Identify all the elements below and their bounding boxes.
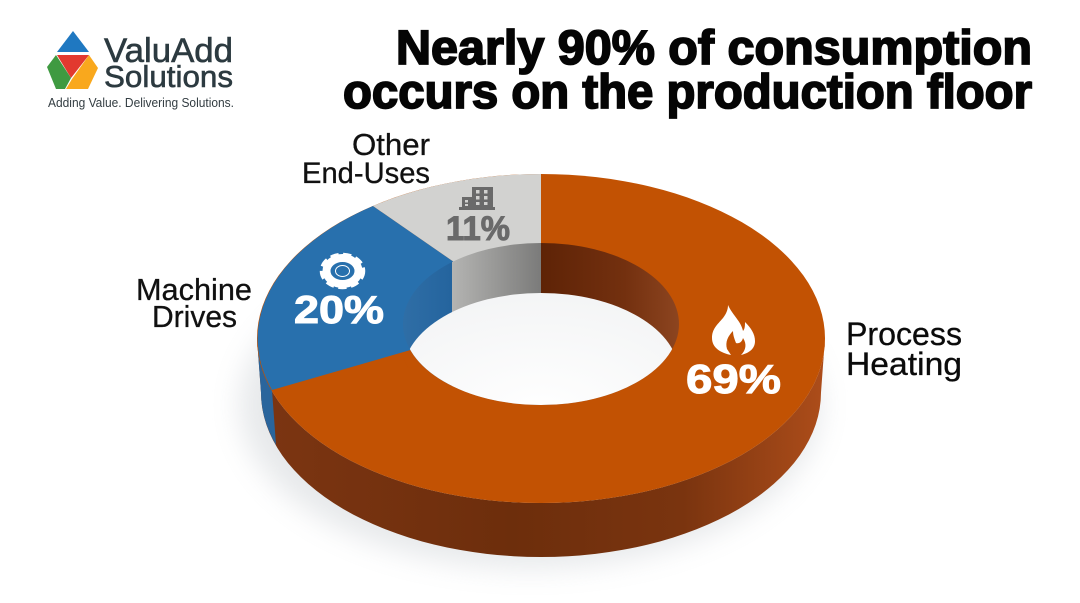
- logo wordmark: ValuAdd: [104, 32, 233, 70]
- slice: machine drives top face: [258, 206, 480, 390]
- logo icon: [47, 31, 98, 89]
- logo wordmark: Solutions: [104, 59, 233, 94]
- icon: gear: [322, 255, 363, 287]
- value: 69%: 69%: [686, 356, 781, 402]
- title: [343, 22, 1032, 119]
- title: occurs on the production floor: [343, 66, 1032, 119]
- slice: other end-uses top face: [373, 174, 541, 280]
- label: process heating: Process: [846, 316, 962, 352]
- value: 11%: 11%: [446, 210, 510, 248]
- inner wall: orange: [541, 243, 679, 405]
- slice: process heating top face: [257, 174, 825, 503]
- logo: [47, 31, 234, 110]
- inner wall: blue: [409, 262, 452, 386]
- logo tagline: Adding Value. Delivering Solutions.: [48, 96, 234, 110]
- logo wordmark: [104, 32, 233, 94]
- value: 20%: 20%: [294, 289, 384, 332]
- slice edge to cover the blue wall foot: [402, 353, 418, 368]
- label: other end-uses: Other: [352, 127, 430, 162]
- ground shadow: [240, 242, 820, 568]
- outer side wall: orange: [257, 338, 825, 557]
- inner wall: grey: [452, 243, 541, 405]
- label: process heating: [846, 316, 962, 382]
- 3D donut chart: [240, 174, 825, 568]
- label: other end-uses: End-Uses: [302, 157, 430, 190]
- inner wall and hole: [409, 243, 679, 405]
- title: Nearly 90% of consumption: [396, 22, 1032, 75]
- label: machine drives: [136, 272, 252, 334]
- label: machine drives: Machine: [136, 272, 252, 307]
- icon: flame: [712, 305, 755, 355]
- label: process heating: Heating: [846, 346, 962, 382]
- label: other end-uses: [302, 127, 430, 190]
- icon: building: [459, 187, 495, 210]
- hole: [410, 293, 672, 405]
- outer side wall: blue: [257, 338, 276, 445]
- label: machine drives: Drives: [152, 299, 237, 334]
